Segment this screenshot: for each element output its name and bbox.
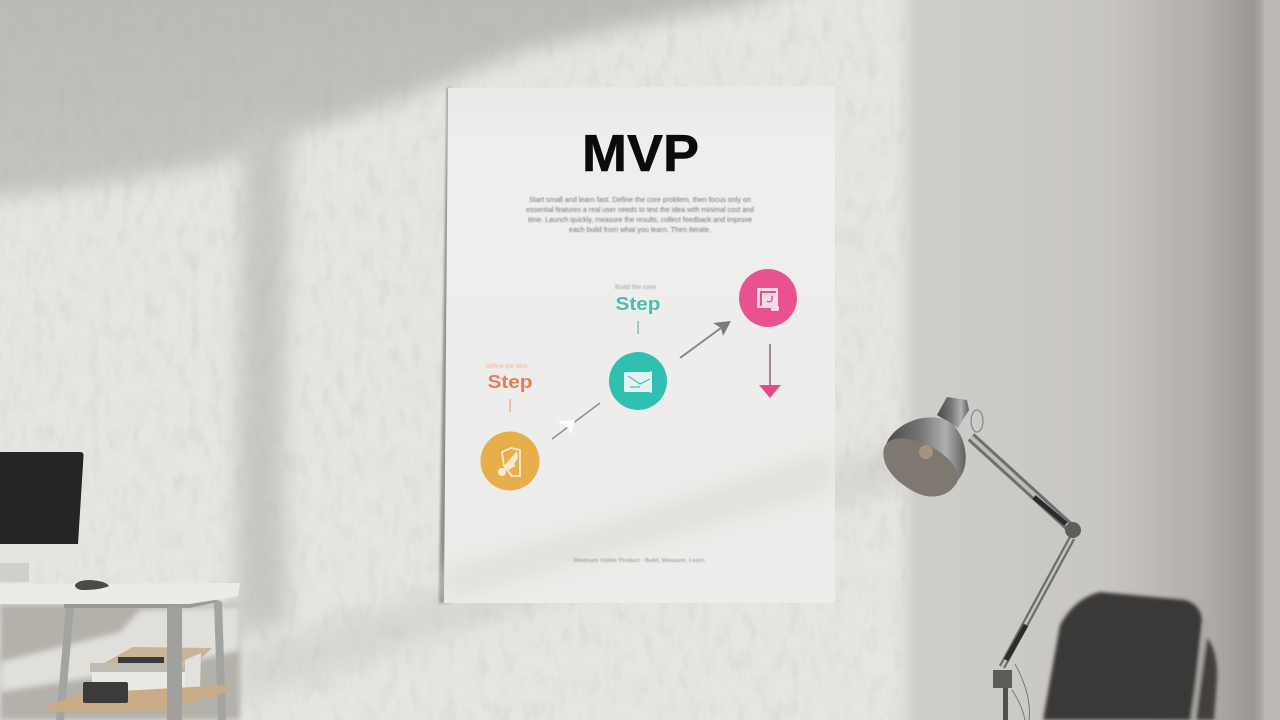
step 1: orange label: Define the idea — [486, 363, 528, 370]
step 1: orange label — [486, 363, 532, 412]
icon: monitor — [0, 452, 84, 582]
description text: essential features a real user needs to test the idea with minimal cost and — [526, 205, 754, 214]
poster shadow — [439, 88, 451, 603]
wall texture — [0, 0, 905, 720]
diagonal shadow on poster — [444, 448, 835, 600]
lamp shade — [885, 417, 966, 496]
arrow: pink down — [759, 344, 781, 398]
poster — [444, 86, 835, 603]
lamp — [883, 397, 1081, 720]
description text: time. Launch quickly, measure the results, collect feedback and improve — [528, 215, 752, 224]
title: MVP — [582, 125, 699, 183]
lamp neck — [937, 397, 969, 428]
footer text: Minimum Viable Product · Build, Measure, Learn — [574, 558, 704, 564]
icon: teal circle with envelope — [609, 352, 667, 410]
arrow: teal to pink — [680, 321, 731, 358]
lamp shade interior — [883, 438, 958, 496]
icon: pink circle with image frame — [739, 269, 797, 327]
description text: Start small and learn fast. Define the core problem, then focus only on — [529, 195, 751, 204]
chair — [1043, 592, 1217, 720]
lamp arm upper — [971, 437, 1073, 530]
lamp arm lower — [1002, 538, 1072, 667]
desktop — [0, 583, 240, 604]
far right edge — [1265, 0, 1280, 720]
desk shadow on wall — [0, 604, 240, 720]
shelf with box and books — [48, 607, 230, 720]
desk legs — [56, 602, 226, 720]
lamp base — [993, 664, 1029, 720]
arrow: orange to teal — [552, 403, 600, 439]
step 2: teal label: Build the core — [615, 284, 656, 291]
step 2: teal label: Step — [616, 294, 660, 314]
step 1: orange label: Step — [488, 372, 532, 392]
icon: orange circle with tool — [480, 432, 540, 490]
description text — [526, 195, 754, 234]
lamp joint — [1065, 522, 1081, 538]
diagonal sun band on the lower wall — [240, 440, 910, 705]
vertical window-frame shadow — [235, 120, 290, 635]
step 2: teal label — [615, 284, 660, 334]
icon: mouse — [75, 580, 109, 590]
right wall shade — [906, 0, 1266, 720]
desk scene — [0, 452, 240, 720]
top window shadow — [0, 0, 900, 205]
lamp bulb — [919, 445, 933, 459]
description text: each build from what you learn. Then iterate. — [569, 225, 711, 234]
